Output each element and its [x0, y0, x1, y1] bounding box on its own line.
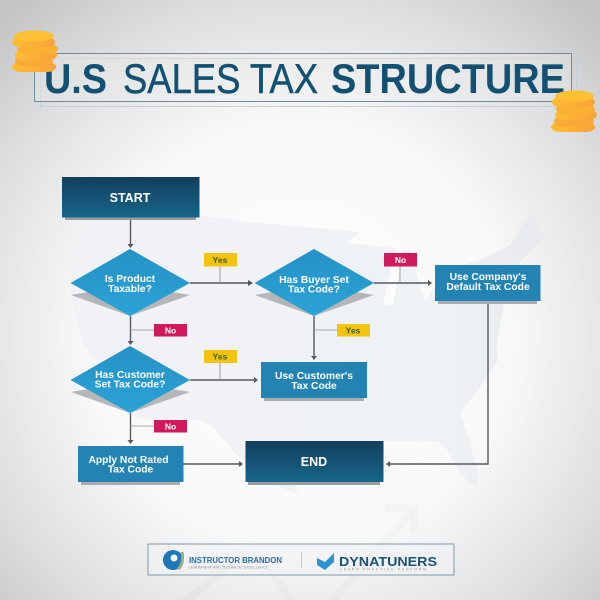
label: no, customer: No [165, 422, 176, 432]
connector arrows [128, 217, 488, 467]
label: yes, customer: Yes [213, 352, 228, 362]
title text: U.S [44, 55, 107, 102]
title text: STRUCTURE [331, 55, 565, 102]
process: use company's default tax code: Default Tax Code [446, 282, 530, 293]
icon: dynatuners check mark [317, 553, 334, 570]
label: no, product not taxable [154, 324, 187, 336]
process: apply not rated tax code [78, 446, 184, 485]
decision: has buyer set tax code: Has Buyer Set [279, 275, 349, 286]
process: use company's default tax code [435, 265, 540, 304]
decision: is product taxable [70, 249, 190, 316]
end box: END [301, 455, 327, 469]
process: use customer's tax code [261, 362, 367, 401]
process: use customer's tax code: Use Customer's [275, 371, 353, 382]
label: yes, product taxable: Yes [213, 255, 228, 265]
decision: has buyer set tax code: Tax Code? [288, 284, 340, 296]
label: yes, product taxable [204, 253, 237, 266]
dynatuners wordmark: DYNATUNERS [339, 554, 437, 569]
label: yes, customer [204, 350, 237, 363]
label: yes, buyer [337, 324, 370, 336]
decision: has customer set tax code: Has Customer [95, 370, 165, 381]
decorative arrow watermark [183, 508, 414, 600]
icon: coin stack top left [12, 30, 58, 72]
title text [44, 55, 565, 102]
start box [62, 177, 200, 220]
decision: has customer set tax code: Set Tax Code? [95, 380, 165, 390]
label: no, buyer: No [395, 255, 406, 265]
decision: is product taxable: Taxable? [108, 284, 152, 295]
instructor brandon wordmark: INSTRUCTOR BRANDON [189, 556, 282, 565]
process: use company's default tax code: Use Company's [450, 272, 527, 283]
label: no, product not taxable: No [165, 326, 176, 336]
dynatuners tagline: LEARN PRACTICE PERFORM [340, 568, 426, 572]
footer logo bar [148, 544, 454, 575]
process: apply not rated tax code: Apply Not Rated [88, 455, 169, 466]
process: apply not rated tax code: Tax Code [108, 464, 154, 476]
end box [246, 441, 384, 485]
title text: SALES TAX [123, 55, 318, 102]
decision: is product taxable: Is Product [105, 274, 156, 285]
label: no, customer [154, 420, 187, 432]
label: yes, buyer: Yes [346, 326, 361, 336]
process: use customer's tax code: Tax Code [291, 381, 337, 392]
decision: has customer set tax code [70, 346, 190, 413]
background map of the USA [70, 212, 545, 493]
start box: START [110, 191, 151, 205]
icon: coin stack bottom right [551, 90, 597, 132]
icon: instructor brandon logo [163, 550, 183, 570]
instructor brandon tagline: LEADERSHIP AND TECHNICAL EXCELLENCE [189, 566, 269, 570]
title banner [34, 54, 576, 106]
label: no, buyer [384, 253, 417, 266]
decision: has buyer set tax code [254, 249, 374, 316]
